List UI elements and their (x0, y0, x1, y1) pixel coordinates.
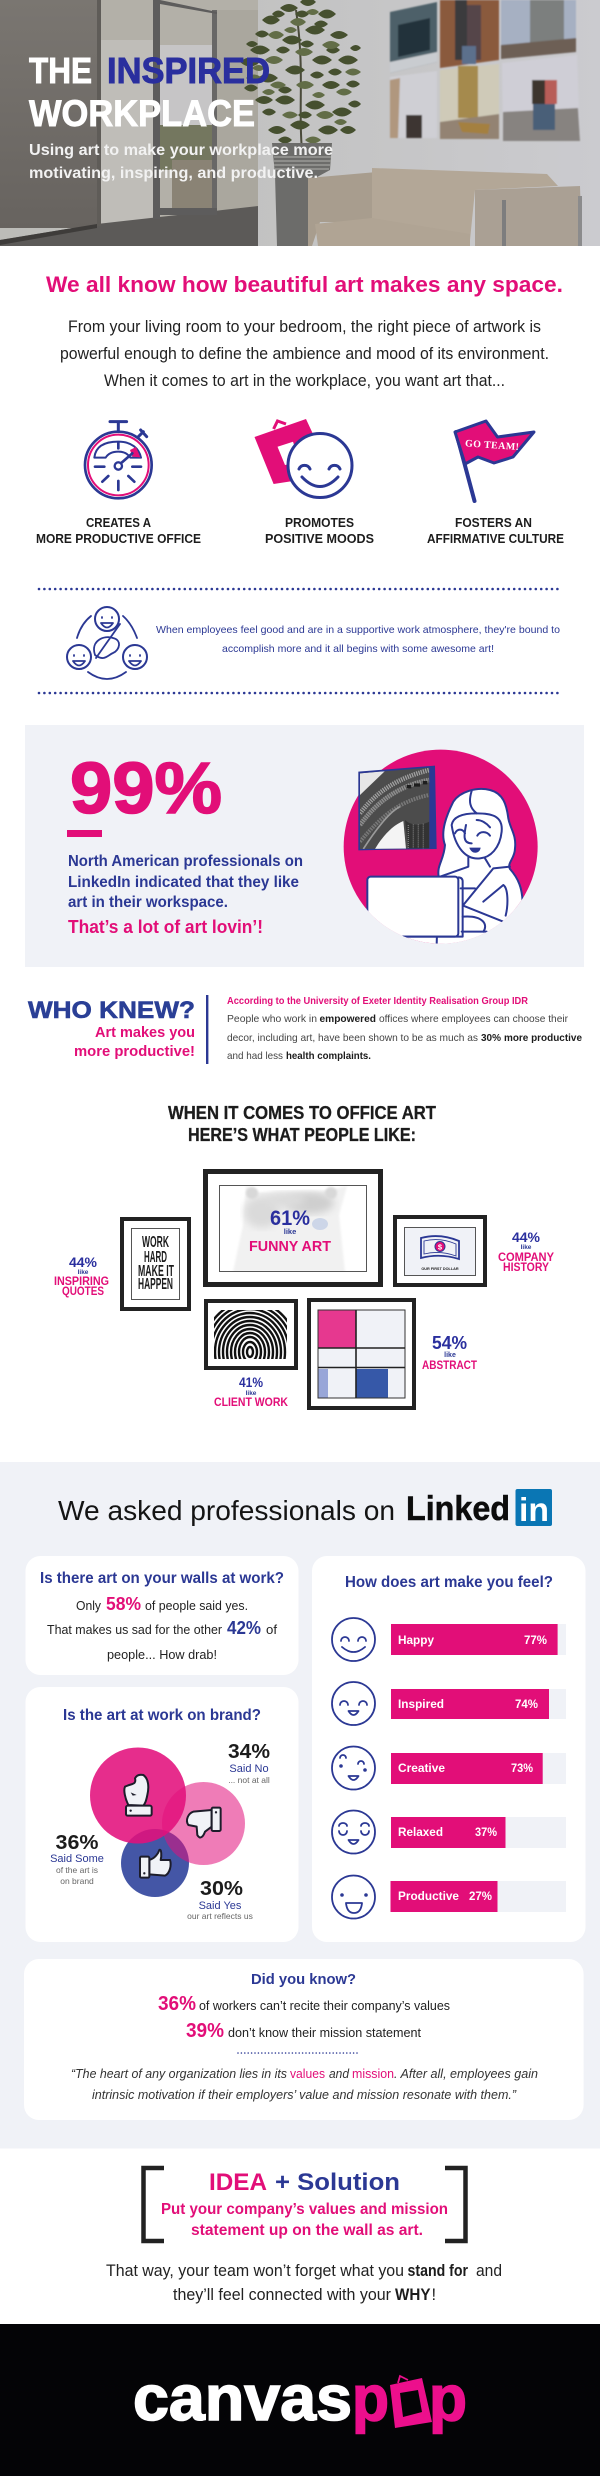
icon captions: POSITIVE MOODS (265, 531, 374, 546)
bar: creative (332, 1746, 566, 1790)
who knew heading: WHO KNEW? (28, 997, 195, 1024)
card: how art makes you feel (312, 1556, 586, 1942)
venn diagram (90, 1748, 245, 1897)
frame: first dollar: OUR FIRST DOLLAR (421, 1267, 459, 1271)
label: said yes: 30% (200, 1878, 243, 1900)
intro paragraph: From your living room to your bedroom, the right piece of artwork is (68, 318, 541, 336)
linkedin statement (68, 853, 303, 937)
bar: productive: 27% (469, 1889, 492, 1903)
label: inspiring quotes (54, 1254, 109, 1298)
illustration: woman at laptop (344, 750, 538, 948)
solution text: Put your company’s values and mission (161, 2201, 448, 2218)
heading: beautiful art: We all know how beautiful art makes any space. (46, 272, 563, 297)
label: abstract (422, 1333, 478, 1372)
bar: relaxed: 37% (475, 1825, 497, 1839)
quote: values (290, 2067, 325, 2081)
bar: relaxed (332, 1810, 566, 1854)
bar: creative: Creative (398, 1761, 445, 1775)
quote: “The heart of any organization lies in its (71, 2067, 287, 2081)
closing text: stand for (408, 2262, 468, 2280)
exeter study text: offices where employees can choose their (379, 1013, 568, 1025)
panel: 99 percent (25, 725, 584, 967)
eiffel tower art print (358, 766, 437, 850)
plant (240, 0, 361, 150)
card: how art makes you feel: How does art make you feel? (345, 1574, 553, 1591)
hero banner (0, 0, 600, 246)
icon: go team flag: GO TEAM! (465, 438, 519, 453)
survey heading (58, 1489, 552, 1528)
label: client work: 41% (239, 1375, 263, 1390)
card: art on walls: Only (76, 1598, 101, 1613)
canvaspop logo: p (429, 2362, 467, 2434)
closing text: they’ll feel connected with your (173, 2286, 391, 2304)
label: said yes (187, 1878, 253, 1921)
solution text (161, 2201, 448, 2239)
label: abstract: like (444, 1352, 456, 1359)
label: said some: Said Some (50, 1853, 104, 1865)
frame: first dollar (395, 1217, 485, 1285)
heading: office art: HERE’S WHAT PEOPLE LIKE: (188, 1125, 416, 1145)
exeter study text: According to the University of Exeter Identity Realisation Group IDR (227, 995, 528, 1007)
closing text: and (476, 2262, 502, 2280)
bar: happy: 77% (524, 1633, 547, 1647)
who knew heading: Art makes you (95, 1024, 195, 1041)
bar: relaxed: Relaxed (398, 1825, 443, 1839)
frame: funny art: FUNNY ART (249, 1239, 331, 1255)
canvaspop logo (133, 2362, 467, 2434)
frame: abstract (309, 1300, 414, 1408)
frame: funny art (206, 1172, 380, 1284)
exeter study text: People who work in (227, 1013, 317, 1025)
heading: office art (168, 1103, 436, 1145)
exeter study text: and had less (227, 1050, 283, 1062)
bar: productive: Productive (398, 1889, 459, 1903)
linkedin statement: North American professionals on (68, 853, 303, 870)
label: client work: CLIENT WORK (214, 1397, 289, 1409)
card: art on brand: Is the art at work on brand? (63, 1707, 261, 1724)
frame: funny art: like (284, 1227, 296, 1236)
canvaspop logo: p (352, 2362, 389, 2434)
card: did you know: Did you know? (251, 1971, 356, 1988)
label: said some: of the art is (56, 1865, 98, 1875)
wall art panels (390, 0, 580, 141)
linkedin statement: art in their workspace. (68, 894, 228, 911)
label: client work: like (246, 1390, 257, 1397)
title: THE (29, 50, 92, 91)
label: client work (214, 1375, 289, 1409)
title (29, 50, 270, 134)
icon captions (36, 515, 564, 546)
heading: office art: WHEN IT COMES TO OFFICE ART (168, 1103, 436, 1123)
icons: hands (124, 1775, 221, 1878)
icon captions: CREATES A (86, 515, 152, 530)
frame: inspiring quote (122, 1219, 189, 1309)
label: said no: 34% (228, 1741, 270, 1763)
linkedin statement: LinkedIn indicated that they like (68, 874, 299, 891)
label: inspiring quotes: INSPIRING (54, 1276, 109, 1288)
bar: happy: Happy (398, 1633, 434, 1647)
label: inspiring quotes: QUOTES (62, 1286, 104, 1298)
exeter study text: empowered (320, 1013, 376, 1025)
label: inspiring quotes: like (78, 1269, 89, 1276)
icon captions: MORE PRODUCTIVE OFFICE (36, 531, 201, 546)
bar: inspired (332, 1682, 566, 1725)
bar: creative: 73% (511, 1761, 533, 1775)
label: abstract: ABSTRACT (422, 1358, 478, 1372)
supportive atmosphere text: When employees feel good and are in a supportive work atmosphere, they're bound to (156, 624, 560, 636)
footer (0, 2324, 600, 2476)
panel: linkedin survey (0, 1462, 600, 2148)
card: art on walls: Is there art on your walls at work? (40, 1570, 284, 1587)
label: company history: like (521, 1244, 532, 1251)
intro paragraph (60, 318, 549, 390)
title: WORKPLACE (29, 93, 255, 134)
frame: inspiring quote: HAPPEN (138, 1276, 173, 1293)
icon: stopwatch (85, 422, 152, 498)
quote: mission (352, 2067, 394, 2081)
card: art on walls: 42% (227, 1618, 261, 1638)
supportive atmosphere text (156, 624, 560, 655)
closing text: That way, your team won’t forget what you (106, 2262, 404, 2280)
icon: team and palette (67, 607, 147, 679)
exeter study text: decor, including art, have been shown to be as much as (227, 1032, 478, 1044)
who knew heading: more productive! (74, 1043, 195, 1060)
closing text: WHY (395, 2286, 430, 2304)
card: art on walls: That makes us sad for the other (47, 1622, 223, 1637)
survey heading: in (519, 1491, 549, 1528)
closing text: ! (432, 2286, 436, 2304)
grumpy cat (233, 1186, 347, 1272)
subtitle: motivating, inspiring, and productive. (29, 165, 318, 182)
brackets (144, 2168, 466, 2241)
supportive atmosphere text: accomplish more and it all begins with some awesome art! (222, 643, 494, 655)
bar: happy (332, 1618, 566, 1661)
bar: inspired: Inspired (398, 1697, 444, 1711)
frame: inspiring quote: WORK (142, 1234, 169, 1251)
card: art on walls: people... How drab! (107, 1647, 217, 1662)
icon: go team flag (455, 421, 534, 501)
label: company history: 44% (512, 1229, 541, 1245)
sofa (308, 168, 582, 246)
card: did you know: 36% (158, 1993, 196, 2015)
survey heading: We asked professionals on (58, 1495, 395, 1526)
label: said no (228, 1741, 270, 1785)
statistic: 99%: 99% (70, 749, 222, 829)
frame: inspiring quote: MAKE IT (138, 1263, 174, 1280)
label: abstract: 54% (432, 1333, 467, 1353)
linkedin statement: That’s a lot of art lovin’! (68, 917, 263, 937)
exeter study text: health complaints. (286, 1050, 371, 1062)
card: did you know: 39% (186, 2020, 224, 2042)
label: said no: ... not at all (228, 1775, 270, 1785)
idea heading: IDEA (209, 2169, 267, 2196)
subtitle (29, 142, 333, 182)
idea heading: + Solution (275, 2169, 400, 2196)
card: did you know (24, 1959, 584, 2120)
quote: . After all, employees gain (394, 2067, 538, 2081)
card: art on walls: of people said yes. (145, 1598, 248, 1613)
card: did you know: of workers can’t recite their company’s values (199, 1998, 450, 2013)
hero office photo (0, 0, 600, 246)
idea heading (209, 2169, 400, 2196)
who knew block (28, 995, 582, 1064)
label: said some (50, 1832, 104, 1886)
frame: inspiring quote: HARD (144, 1249, 167, 1266)
icon: smiley with pink frame (254, 419, 352, 498)
exeter study text: 30% (481, 1032, 502, 1044)
quote (71, 2067, 538, 2102)
survey heading: Linked (406, 1490, 510, 1528)
label: said yes: our art reflects us (187, 1911, 253, 1921)
subtitle: Using art to make your workplace more (29, 142, 333, 159)
label: said no: Said No (229, 1763, 269, 1775)
solution text: statement up on the wall as art. (191, 2222, 423, 2239)
bar: inspired: 74% (515, 1697, 538, 1711)
exeter study text (227, 995, 582, 1062)
label: company history (498, 1229, 554, 1274)
card: art on walls: 58% (106, 1594, 141, 1614)
who knew heading (28, 997, 195, 1060)
label: inspiring quotes: 44% (69, 1254, 98, 1270)
frame: client work fingerprint (204, 1299, 298, 1370)
icon captions: FOSTERS AN (455, 515, 532, 530)
label: company history: COMPANY (498, 1252, 554, 1264)
intro paragraph: powerful enough to define the ambience and mood of its environment. (60, 345, 549, 363)
closing text (106, 2262, 502, 2304)
label: said yes: Said Yes (199, 1900, 242, 1912)
idea and solution callout (144, 2168, 466, 2241)
frame: funny art: 61% (270, 1207, 310, 1230)
card: art on walls (26, 1556, 298, 1675)
intro paragraph: When it comes to art in the workplace, you want art that... (104, 372, 505, 390)
pot (272, 143, 332, 246)
icon: dollar bill: $ (438, 1242, 443, 1252)
card: did you know: don’t know their mission statement (228, 2025, 421, 2040)
icon captions: PROMOTES (285, 515, 354, 530)
label: said some: on brand (60, 1876, 94, 1886)
bar: productive (332, 1876, 566, 1918)
canvaspop logo: canvas (133, 2362, 352, 2434)
exeter study text: more productive (504, 1032, 582, 1044)
label: company history: HISTORY (503, 1262, 549, 1274)
label: said some: 36% (56, 1832, 99, 1854)
card: art on brand (26, 1687, 298, 1942)
card: art on walls: of (266, 1622, 277, 1637)
quote: and (329, 2067, 350, 2081)
title: INSPIRED (107, 50, 270, 91)
icon captions: AFFIRMATIVE CULTURE (427, 531, 564, 546)
quote: intrinsic motivation if their employers’ value and mission resonate with them.” (92, 2088, 517, 2102)
